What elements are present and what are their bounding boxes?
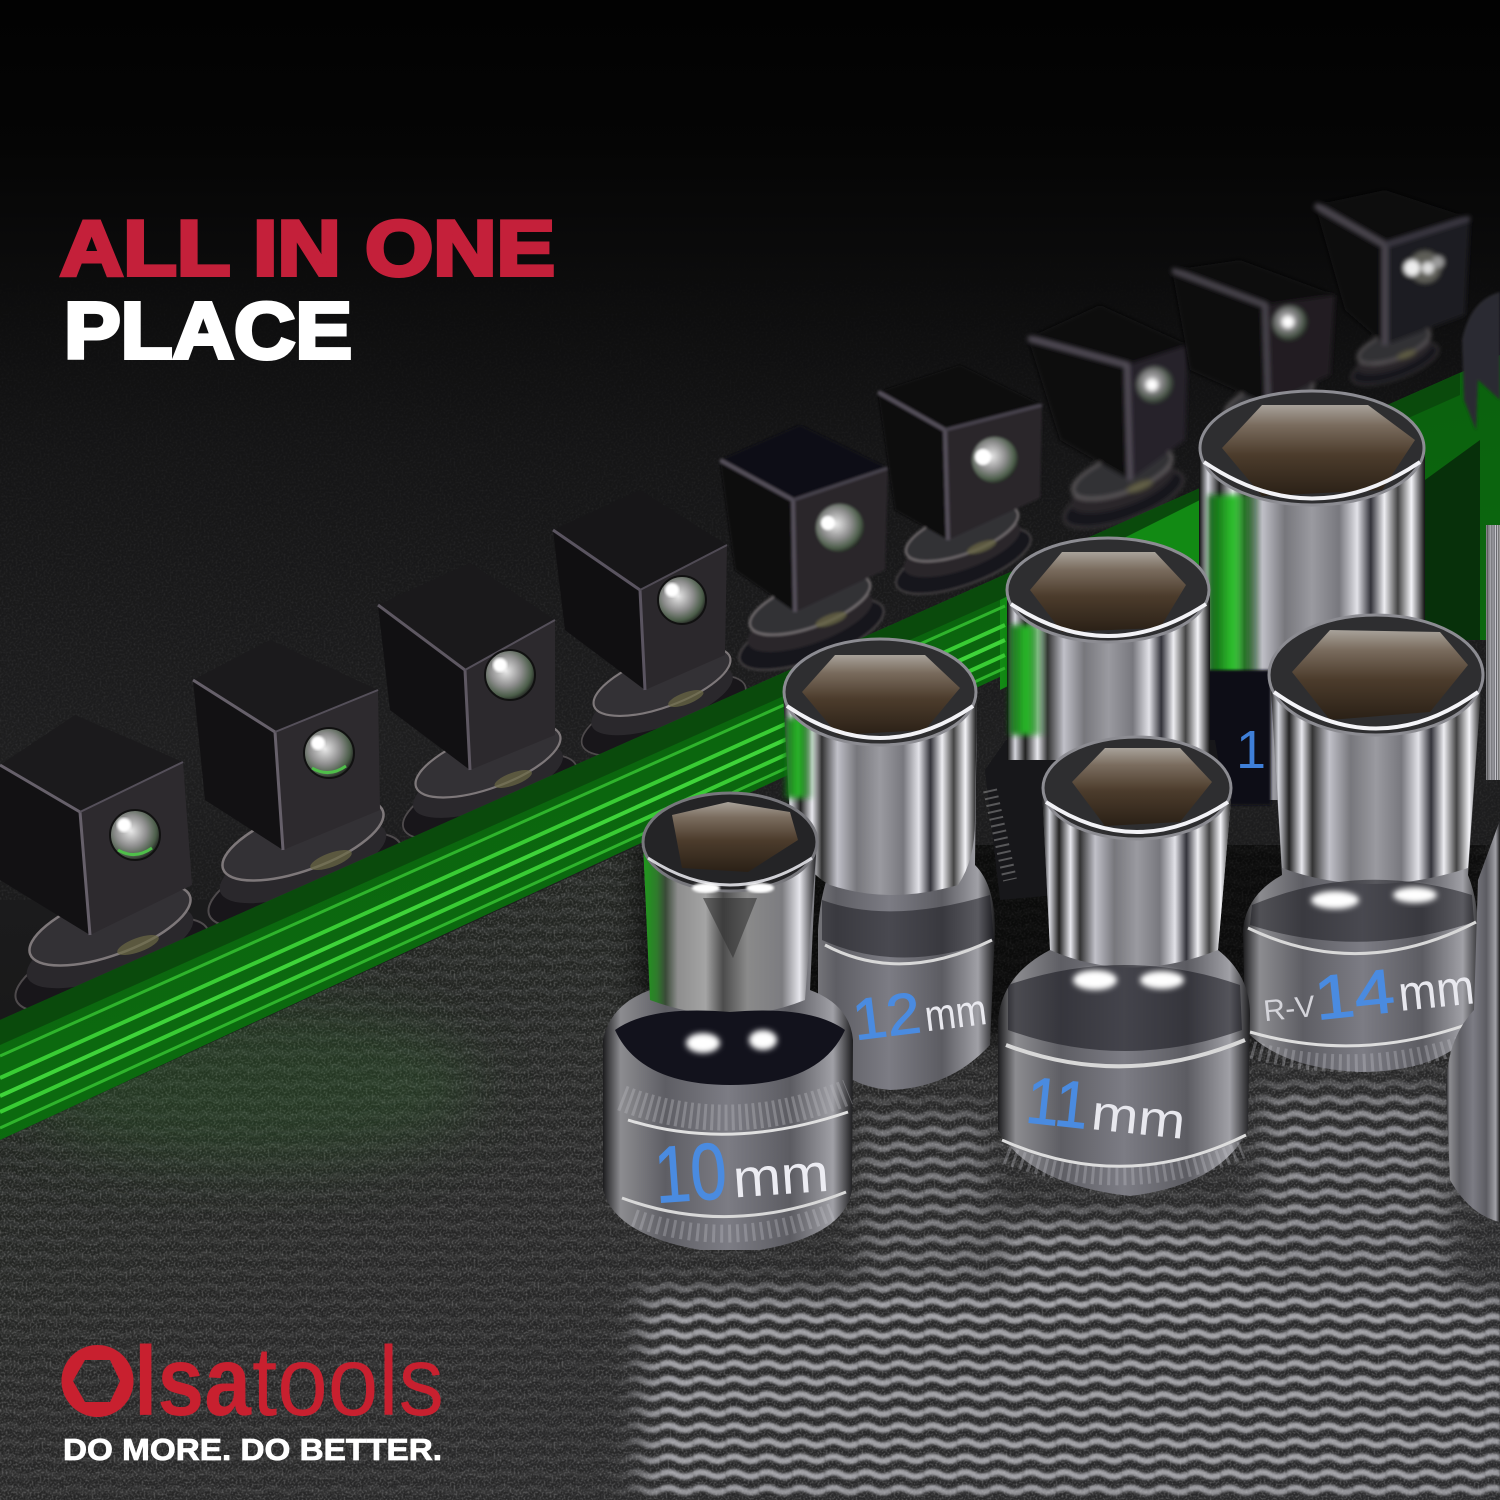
size label 14mm: mm bbox=[1396, 958, 1477, 1022]
size label 11mm bbox=[1023, 1062, 1190, 1153]
adapter 7 bbox=[1028, 305, 1190, 540]
socket at right edge, front bbox=[1446, 820, 1500, 1222]
row of square drive adapters bbox=[0, 190, 1470, 1032]
socket: 14mm bbox=[1243, 615, 1483, 1072]
size label 12mm bbox=[849, 972, 990, 1053]
adapter 6 bbox=[878, 365, 1042, 608]
heading: place: PLACE bbox=[64, 286, 352, 375]
socket: rear medium bbox=[985, 538, 1225, 900]
size label 11mm: mm bbox=[1089, 1084, 1188, 1150]
title bbox=[60, 204, 555, 375]
size label 12mm: mm bbox=[922, 985, 989, 1041]
socket at right edge, rear bbox=[1462, 292, 1500, 780]
adapter 1 bbox=[0, 715, 219, 1032]
socket: 11mm bbox=[998, 737, 1250, 1196]
size label 11mm: 11 bbox=[1023, 1062, 1092, 1143]
adapter 2 bbox=[193, 640, 412, 947]
wordmark bold part: lsa bbox=[134, 1326, 252, 1436]
size label 14mm bbox=[1259, 948, 1477, 1039]
adapter 4 bbox=[553, 490, 755, 772]
size label 10mm bbox=[651, 1119, 831, 1220]
engraved digit fragment: 1 bbox=[1236, 720, 1266, 780]
size label 12mm: 12 bbox=[849, 980, 924, 1053]
socket: rear large bbox=[1199, 391, 1425, 805]
logo: Olsatools bbox=[62, 1326, 444, 1436]
green socket rail bbox=[0, 355, 1500, 1140]
socket: 12mm bbox=[783, 639, 995, 1090]
size label 10mm: mm bbox=[731, 1143, 831, 1209]
size label 10mm: 10 bbox=[651, 1126, 729, 1220]
adapter 5 bbox=[720, 425, 892, 685]
heading: all in one: ALL IN ONE bbox=[60, 204, 555, 292]
adapter 8 bbox=[1172, 260, 1335, 458]
adapter 3 bbox=[378, 563, 587, 857]
icon: hex socket O bbox=[62, 1345, 134, 1417]
wordmark light part: tools bbox=[252, 1326, 444, 1436]
size label 14mm: R-V bbox=[1262, 990, 1317, 1028]
tagline: DO MORE. DO BETTER. bbox=[63, 1432, 442, 1467]
adapter 9 bbox=[1315, 190, 1470, 394]
socket: 10mm bbox=[603, 793, 853, 1250]
textured mat bbox=[0, 825, 1500, 1500]
size label 14mm: 14 bbox=[1311, 957, 1398, 1034]
